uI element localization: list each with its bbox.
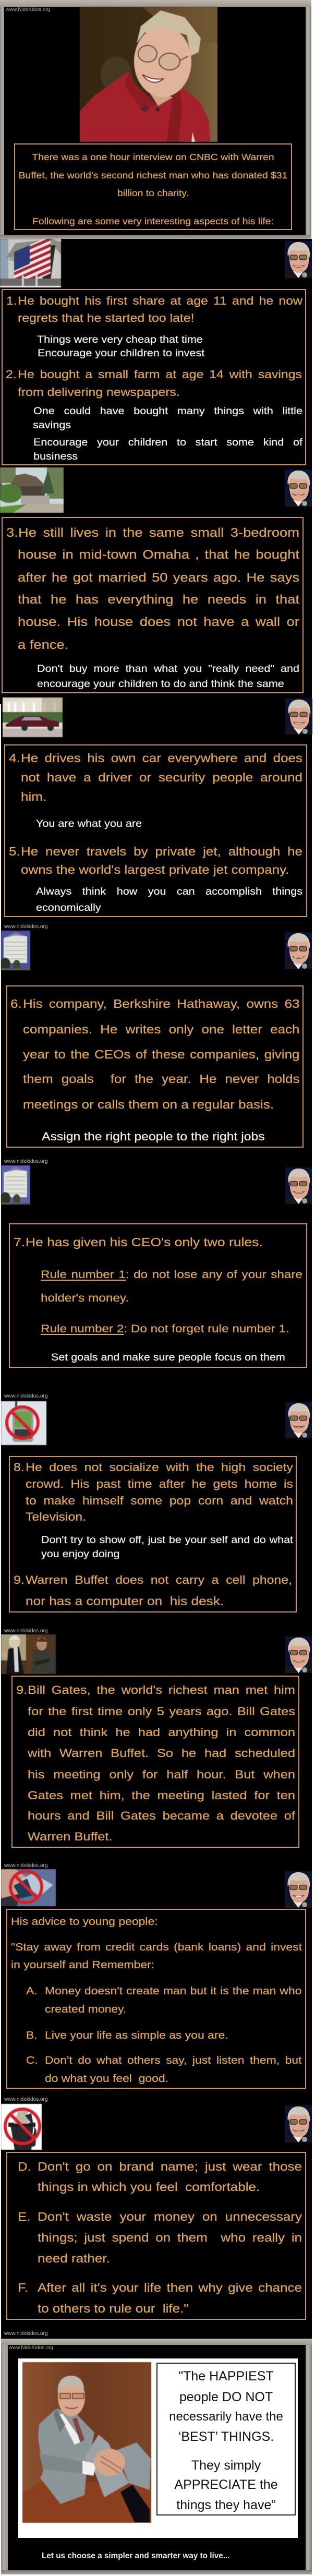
image: crossed-out credit cards	[1, 1869, 56, 1907]
fact 1: He bought his first share at age 11 and he now	[18, 294, 302, 307]
advice C	[26, 2052, 302, 2088]
takeaway 1: Things were very cheap that time	[37, 334, 203, 345]
advice F: to others to rule our life."	[38, 2302, 188, 2315]
panel: fact 3	[2, 517, 304, 693]
advice quote intro	[11, 1942, 302, 1971]
quote line: things they have”	[176, 2498, 276, 2512]
image: small house	[0, 467, 64, 513]
advice A	[26, 1982, 302, 2018]
takeaway 2: business	[33, 451, 78, 462]
quote line: They simply	[191, 2458, 261, 2473]
fact 5: 5.	[9, 845, 20, 858]
fact 2: He bought a small farm at age 14 with savings	[18, 368, 302, 381]
fact 1	[6, 294, 302, 324]
panel: intro slide frame	[0, 0, 311, 239]
watermark: www.nidokidos.org	[4, 924, 47, 930]
icon: Buffett head 7	[285, 1636, 312, 1673]
image: Berkshire Hathaway building	[1, 930, 31, 970]
fact 8: crowd. His past time after he gets home is	[26, 1477, 293, 1490]
quote line: "The HAPPIEST	[178, 2369, 274, 2384]
fact 3: that he has everything he needs in that	[18, 593, 299, 607]
image: crossed-out money in trash	[1, 2104, 42, 2150]
rule 1: holder's money.	[41, 1292, 129, 1304]
takeaway 8: Don't try to show off, just be your self and do what	[41, 1535, 293, 1546]
fact 1: regrets that he started too late!	[18, 311, 195, 324]
fact 9: nor has a computer on his desk.	[26, 1594, 224, 1608]
watermark: www.NidoKidos.org	[6, 7, 50, 13]
icon: Buffett head 5	[285, 1167, 312, 1204]
advice D: Don't go on brand name; just wear those	[38, 2160, 302, 2173]
fact 4: He drives his own car everywhere and does	[21, 751, 302, 765]
fact 5: He never travels by private jet, although he	[21, 845, 302, 858]
fact 5: owns the world's largest private jet company.	[21, 863, 289, 876]
fact 2: 2.	[6, 368, 17, 381]
rule 2: Rule number 2: Do not forget rule number 1.	[41, 1322, 289, 1335]
watermark: www.nidokidos.org	[4, 2097, 47, 2102]
Bill Gates story: his meeting only for half hour. But when	[28, 1768, 295, 1781]
panel: fact 7 rules	[9, 1223, 307, 1368]
advice C: Don't do what others say, just listen them, but	[45, 2055, 301, 2066]
panel: fact 6	[6, 985, 304, 1148]
advice E: need rather.	[38, 2252, 110, 2265]
takeaway 5: Always think how you can accomplish things	[36, 886, 302, 897]
image: stock exchange with flag	[0, 238, 62, 288]
fact 3	[6, 526, 299, 652]
takeaway 1: Encourage your children to invest	[38, 348, 204, 359]
panel: fact 9 Bill Gates	[11, 1676, 299, 1848]
panel: facts 1 and 2	[2, 289, 306, 465]
image: car and house	[2, 697, 63, 738]
takeaway 3	[37, 664, 299, 690]
advice D: things in which you feel comfortable.	[38, 2180, 260, 2194]
icon: Buffett head 2	[285, 470, 312, 507]
takeaway 3: Don't buy more than what you "really need" and	[37, 664, 299, 675]
image: Berkshire Hathaway building again	[1, 1165, 30, 1205]
advice C: C.	[26, 2055, 38, 2066]
fact 9: 9.	[14, 1573, 25, 1586]
callout: interview introduction	[14, 143, 292, 230]
advice E: E.	[18, 2210, 30, 2223]
fact 7: He has given his CEO's only two rules.	[26, 1235, 263, 1249]
takeaway 4: You are what you are	[36, 818, 142, 829]
fact 3: house. His house does not have a wall or	[18, 615, 299, 629]
fact 1: 1.	[6, 294, 17, 307]
quote line: necessarily have the	[169, 2410, 283, 2424]
advice F	[17, 2279, 304, 2317]
background: black page area	[0, 239, 312, 704]
photo: Warren Buffett in red shirt	[79, 6, 218, 142]
rule 1	[41, 1268, 302, 1304]
Bill Gates story: Warren Buffet.	[28, 1830, 113, 1843]
takeaway 6: Assign the right people to the right jobs	[42, 1130, 265, 1143]
icon: Buffett head 9	[285, 2105, 312, 2142]
watermark: www.nidokidos.org	[4, 1159, 47, 1164]
panel: advice continued	[6, 2152, 306, 2320]
white card	[18, 2358, 298, 2538]
fact 9: Warren Buffet does not carry a cell phone,	[26, 1573, 292, 1586]
takeaway 1	[37, 334, 205, 359]
advice F: F.	[18, 2281, 28, 2294]
takeaway 8: you enjoy doing	[41, 1549, 119, 1560]
watermark: www.nidokidos.org	[4, 1628, 47, 1634]
fact 8: to make himself some pop corn and watch	[26, 1494, 293, 1507]
fact 5	[9, 845, 302, 876]
advice B: B.	[26, 2030, 38, 2041]
watermark: www.nidokidos.org	[4, 1863, 47, 1869]
advice D: D.	[18, 2160, 31, 2173]
fact 6: them goals for the year. He never holds	[23, 1072, 299, 1086]
panel: closing slide frame	[1, 2339, 312, 2574]
fact 6	[10, 997, 299, 1111]
fact 2: from delivering newspapers.	[18, 386, 180, 399]
Bill Gates story: with Warren Buffet. So he had scheduled	[28, 1747, 295, 1760]
takeaway 5	[35, 886, 302, 913]
panel: advice to young people	[6, 1909, 306, 2089]
takeaway 8	[41, 1535, 293, 1560]
fact 3: house in mid-town Omaha , that he bought	[18, 548, 299, 562]
Bill Gates story: hours and Bill Gates became a devotee of	[28, 1809, 295, 1822]
intro paragraph: There was a one hour interview on CNBC with Warren	[32, 152, 274, 162]
Bill Gates story: Gates met him, the meeting lasted for ten	[28, 1789, 295, 1802]
advice E: things; just spend on them who really in	[38, 2231, 302, 2244]
fact 8: He does not socialize with the high society	[26, 1461, 293, 1474]
advice quote intro: "Stay away from credit cards (bank loans) and invest	[11, 1942, 302, 1953]
watermark: www.nidokidos.org	[4, 1393, 47, 1399]
advice D	[17, 2158, 304, 2196]
takeaway 2: Encourage your children to start some kind of	[33, 437, 302, 448]
fact 3: a fence.	[18, 638, 68, 652]
icon: Buffett head 8	[285, 1871, 312, 1908]
panel: facts 8 and 9	[9, 1456, 297, 1612]
fact 8: Television.	[26, 1510, 86, 1523]
advice quote intro: in yourself and Remember:	[11, 1959, 154, 1971]
fact 4	[9, 751, 302, 803]
advice A: created money.	[45, 2004, 126, 2015]
takeaway 5: economically	[36, 902, 101, 913]
quote line: ‘BEST’ THINGS.	[178, 2429, 274, 2444]
advice B	[26, 2027, 234, 2044]
takeaway 2: savings	[33, 420, 71, 431]
advice E: Don't waste your money on unnecessary	[38, 2210, 302, 2223]
Bill Gates story	[16, 1683, 295, 1843]
watermark: www.nidokidos.org	[4, 2331, 47, 2337]
fact 3: 3.	[6, 526, 18, 540]
intro paragraph: Buffet, the world’s second richest man who has donated $31	[19, 171, 287, 180]
fact 8	[14, 1461, 293, 1523]
fact 8: 8.	[14, 1461, 25, 1474]
quote box	[156, 2363, 296, 2515]
fact 7: 7.	[14, 1235, 25, 1249]
fact 4: 4.	[9, 751, 20, 765]
advice A: A.	[26, 1985, 38, 1997]
fact 9	[14, 1573, 292, 1608]
background: black page area lower	[1, 704, 312, 2339]
panel: facts 4 and 5	[4, 744, 307, 917]
intro paragraph	[19, 152, 287, 226]
icon: Buffett head 4	[285, 932, 312, 969]
icon: Buffett head 3	[285, 699, 312, 735]
takeaway 7: Set goals and make sure people focus on them	[51, 1352, 285, 1363]
advice F: After all it's your life then why give chance	[38, 2281, 302, 2294]
fact 3: He still lives in the same small 3-bedroom	[18, 526, 299, 540]
fact 6: year to the CEOs of these companies, giving	[23, 1048, 299, 1061]
fact 3: after he got married 50 years ago. He says	[18, 571, 299, 585]
fact 6: His company, Berkshire Hathaway, owns 63	[23, 997, 299, 1010]
icon: Buffett head 6	[285, 1402, 312, 1438]
fact 4: not have a driver or security people around	[21, 771, 302, 784]
Bill Gates story: 9.	[16, 1683, 27, 1696]
rule 1: Rule number 1: do not lose any of your share	[41, 1268, 302, 1281]
fact 4: him.	[21, 790, 46, 803]
takeaway 3: encourage your children to do and think the same	[37, 679, 284, 690]
quote line: people DO NOT	[179, 2390, 273, 2404]
intro paragraph: Following are some very interesting aspects of his life:	[32, 216, 274, 226]
Bill Gates story: for the first time only 5 years ago. Bill Gates	[28, 1705, 295, 1718]
Bill Gates story: did not think he had anything in common	[28, 1726, 295, 1739]
watermark: www.NidoKidos.org	[9, 2345, 53, 2351]
Bill Gates story: Bill Gates, the world's richest man met him	[28, 1683, 295, 1696]
fact 6: 6.	[10, 997, 22, 1010]
closing line: Let us choose a simpler and smarter way to live...	[42, 2551, 229, 2560]
advice heading: His advice to young people:	[11, 1916, 158, 1928]
fact 6: companies. He writes only one letter each	[23, 1022, 299, 1036]
takeaway 2: One could have bought many things with little	[33, 406, 302, 417]
quote line: APPRECIATE the	[174, 2477, 278, 2492]
image: Buffett and Bill Gates	[1, 1634, 56, 1675]
advice A: Money doesn't create man but it is the man who	[45, 1985, 301, 1997]
photo: Buffett seated in suit	[22, 2362, 151, 2523]
icon: Buffett head 1	[285, 241, 312, 278]
intro paragraph: billion to charity.	[117, 188, 189, 198]
fact 2	[6, 368, 302, 399]
advice C: do what you feel good.	[45, 2073, 168, 2085]
image: crossed-out cell phone	[1, 1401, 47, 1446]
takeaway 2	[33, 406, 302, 462]
fact 6: meetings or calls them on a regular basis.	[23, 1098, 274, 1111]
advice B: Live your life as simple as you are.	[45, 2030, 228, 2041]
advice E	[17, 2208, 304, 2267]
